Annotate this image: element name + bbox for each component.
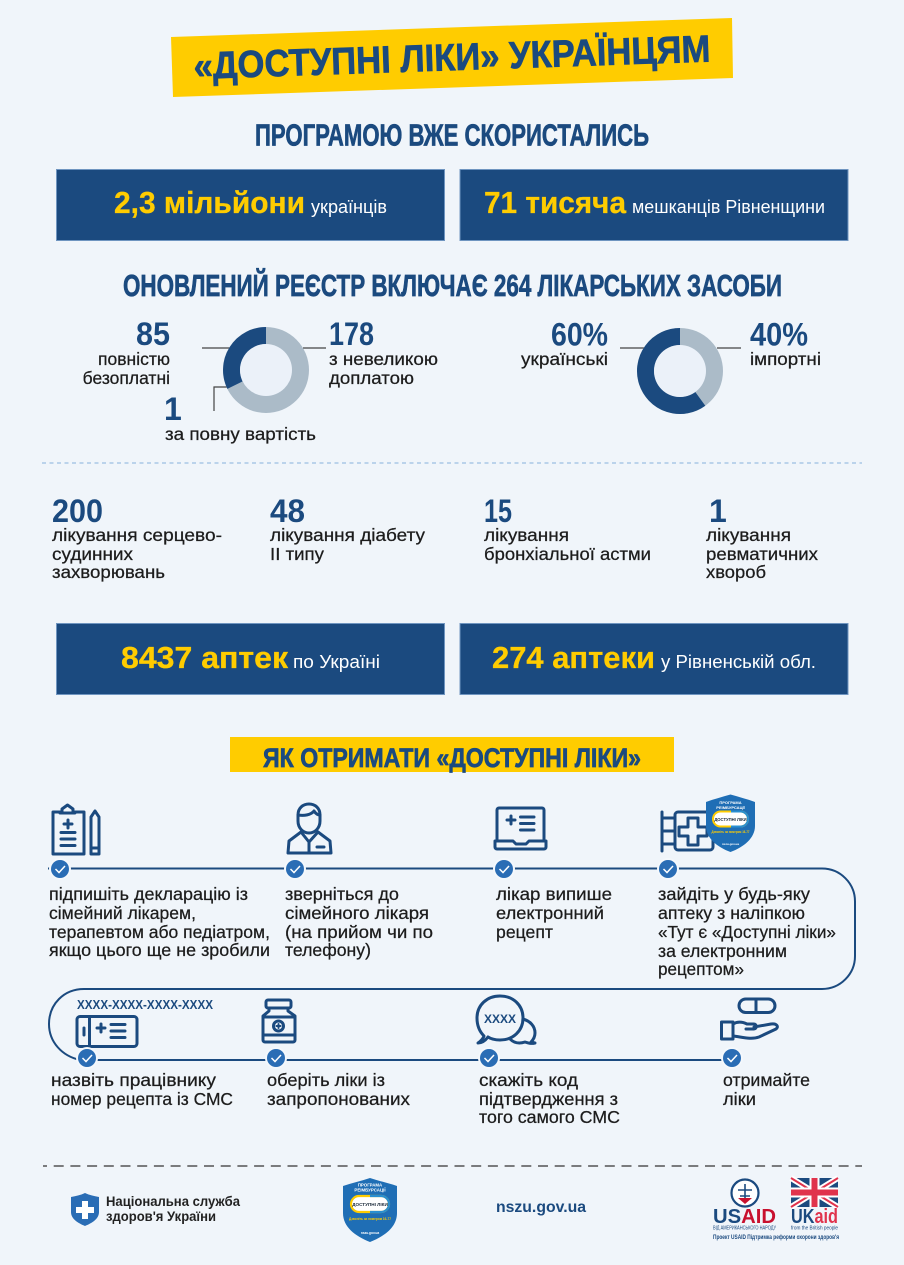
icon: clipboard and pencil: [53, 805, 99, 854]
stat: rheumatic: ревматичних: [706, 544, 818, 564]
step 2: телефону): [285, 940, 371, 960]
logo: UK flag and UKaid: UKaid: [791, 1206, 838, 1228]
project caption: Проект USAID Підтримка реформи охорони здоров'я: [713, 1234, 839, 1241]
donut chart: reimbursement split: повністю: [98, 349, 170, 369]
step 2: (на прийом чи по: [285, 922, 433, 942]
donut chart: reimbursement split: безоплатні: [83, 368, 170, 388]
donut chart: reimbursement split: 85: [136, 316, 170, 352]
heading banner: how to get: ЯК ОТРИМАТИ «ДОСТУПНІ ЛІКИ»: [263, 743, 641, 773]
donut chart: origin split: 40%: [750, 316, 808, 352]
donut chart: reimbursement split: доплатою: [329, 368, 414, 388]
donut chart: reimbursement split: за повну вартість: [165, 424, 316, 444]
step 5: назвіть працівнику: [51, 1070, 216, 1090]
step 8: [721, 999, 810, 1109]
step 1: [49, 805, 270, 960]
logo: reimbursement program shield: [343, 1178, 397, 1242]
step 7: XXXX: [484, 1012, 516, 1026]
step 4: рецептом»: [658, 959, 744, 979]
step 4: за електронним: [658, 941, 787, 961]
icon: reimbursement sticker: ДОСТУПНІ ЛІКИ: [714, 817, 747, 822]
stat: diabetes: лікування діабету: [270, 525, 425, 545]
logo: UK flag and UKaid: from the British people: [791, 1226, 838, 1232]
stat box: pharmacies in Ukraine: 8437 аптек: [121, 640, 288, 675]
donut chart: origin split: [521, 316, 821, 414]
stat box: pharmacies in Rivne region: 274 аптеки: [492, 640, 655, 675]
logo: National Health Service of Ukraine: [71, 1193, 240, 1226]
step 7: [477, 996, 620, 1127]
donut chart: origin split: імпортні: [750, 349, 821, 369]
step 6: оберіть ліки із: [267, 1070, 385, 1090]
step marker: [49, 858, 71, 880]
step 2: зверніться до: [285, 884, 399, 904]
icon: reimbursement sticker: nszu.gov.ua: [722, 842, 739, 846]
step marker: [657, 858, 679, 880]
stat: cardiovascular: лікування серцево-: [52, 525, 222, 545]
step marker: [284, 858, 306, 880]
step 3: рецепт: [496, 922, 553, 942]
logo: reimbursement program shield: nszu.gov.ua: [361, 1231, 379, 1235]
step 7: скажіть код: [479, 1070, 578, 1090]
stat: cardiovascular: [52, 493, 222, 582]
icon: reimbursement sticker: РЕІМБУРСАЦІЇ: [716, 805, 746, 810]
icon: doctor: [288, 804, 331, 853]
step 1: сімейний лікарем,: [49, 903, 196, 923]
donut chart: reimbursement split: 178: [329, 316, 374, 352]
step 4: [657, 794, 836, 979]
stat: cardiovascular: 200: [52, 493, 103, 529]
stat box: Rivne region residents: 71 тисяча: [484, 185, 627, 220]
step 1: якщо цього ще не зробили: [49, 940, 270, 960]
title banner: «ДОСТУПНІ ЛІКИ» УКРАЇНЦЯМ: [193, 28, 711, 88]
icon: pharmacy: [662, 812, 713, 851]
stat: diabetes: 48: [270, 493, 305, 529]
step 6: запропонованих: [267, 1089, 410, 1109]
stat box: Ukrainians: 2,3 мільйони: [114, 185, 305, 220]
donut chart: origin split: українські: [521, 349, 608, 369]
stat: asthma: лікування: [484, 525, 569, 545]
logo: UK flag and UKaid: [791, 1178, 838, 1232]
stat: rheumatic: [706, 493, 818, 582]
stat: diabetes: ІІ типу: [270, 544, 324, 564]
step 1: підпишіть декларацію із: [49, 884, 248, 904]
donut chart: reimbursement split: з невеликою: [329, 349, 438, 369]
stat box: pharmacies in Rivne region: у Рівненській обл.: [661, 652, 816, 672]
stat box: Ukrainians: українців: [311, 197, 387, 217]
step 1: терапевтом або педіатром,: [49, 922, 270, 942]
step 5: [51, 997, 233, 1109]
step marker: [721, 1047, 743, 1069]
stat: rheumatic: лікування: [706, 525, 791, 545]
heading: program users: ПРОГРАМОЮ ВЖЕ СКОРИСТАЛИСЬ: [255, 118, 649, 152]
stat box: pharmacies in Ukraine: [56, 624, 444, 694]
stat: rheumatic: хвороб: [706, 562, 766, 582]
process timeline path: [48, 868, 855, 1060]
step 3: електронний: [496, 903, 604, 923]
logo: reimbursement program shield: ДОСТУПНІ ЛІКИ: [352, 1202, 388, 1207]
step 7: того самого СМС: [479, 1107, 620, 1127]
stat: asthma: 15: [484, 493, 512, 529]
donut chart: origin split: 60%: [551, 316, 608, 352]
icon: reimbursement sticker: [706, 794, 755, 852]
step marker: [478, 1047, 500, 1069]
stat: asthma: [484, 493, 651, 564]
prescription number: XXXX-XXXX-XXXX-XXXX: [77, 997, 213, 1012]
logo: reimbursement program shield: Дзвоніть за номером 16-77: [349, 1216, 392, 1221]
donut chart: reimbursement split: 1: [164, 391, 182, 427]
step 7: підтвердження з: [479, 1089, 618, 1109]
stat box: Ukrainians: [56, 170, 444, 240]
logo: USAID: USAID: [713, 1206, 776, 1228]
step 5: номер рецепта із СМС: [51, 1089, 233, 1109]
icon: laptop: [495, 808, 546, 849]
stat box: pharmacies in Ukraine: по Україні: [293, 652, 380, 672]
logo: reimbursement program shield: ПРОГРАМА: [358, 1182, 383, 1188]
step 4: зайдіть у будь-яку: [658, 884, 810, 904]
stat box: Rivne region residents: мешканців Рівненщини: [632, 197, 825, 217]
step 3: лікар випише: [496, 884, 612, 904]
step 6: [263, 1000, 410, 1109]
stat: rheumatic: 1: [709, 493, 727, 529]
stat: cardiovascular: судинних: [52, 544, 133, 564]
logo: USAID: [713, 1180, 777, 1232]
step marker: [493, 858, 515, 880]
step 8: ліки: [723, 1089, 756, 1109]
step 8: отримайте: [723, 1070, 810, 1090]
stat: cardiovascular: захворювань: [52, 562, 165, 582]
donut chart: reimbursement split: [83, 316, 438, 444]
icon: phone: [77, 1016, 137, 1046]
icon: hand with pill: [722, 999, 777, 1039]
logo: reimbursement program shield: РЕІМБУРСАЦІЇ: [354, 1188, 386, 1192]
logo: National Health Service of Ukraine: здоров'я України: [106, 1209, 216, 1224]
step 2: [284, 804, 433, 960]
logo: National Health Service of Ukraine: Національна служба: [106, 1194, 240, 1209]
stat box: Rivne region residents: [460, 170, 848, 240]
icon: medicine bottle: [263, 1000, 295, 1042]
stat box: pharmacies in Rivne region: [460, 624, 848, 694]
icon: reimbursement sticker: ПРОГРАМА: [719, 800, 742, 805]
icon: chat bubbles: [477, 996, 535, 1043]
step marker: [76, 1047, 98, 1069]
stat: diabetes: [270, 493, 425, 564]
step 2: сімейного лікаря: [285, 903, 429, 923]
step 4: «Тут є «Доступні ліки»: [658, 922, 836, 942]
logo: USAID: ВІД АМЕРИКАНСЬКОГО НАРОДУ: [713, 1226, 777, 1232]
step marker: [265, 1047, 287, 1069]
step 3: [493, 808, 612, 942]
icon: reimbursement sticker: Дзвоніть за номером 16-77: [712, 830, 750, 834]
website: nszu.gov.ua: [496, 1199, 586, 1216]
stat: asthma: бронхіальної астми: [484, 544, 651, 564]
step 4: аптеку з наліпкою: [658, 903, 805, 923]
